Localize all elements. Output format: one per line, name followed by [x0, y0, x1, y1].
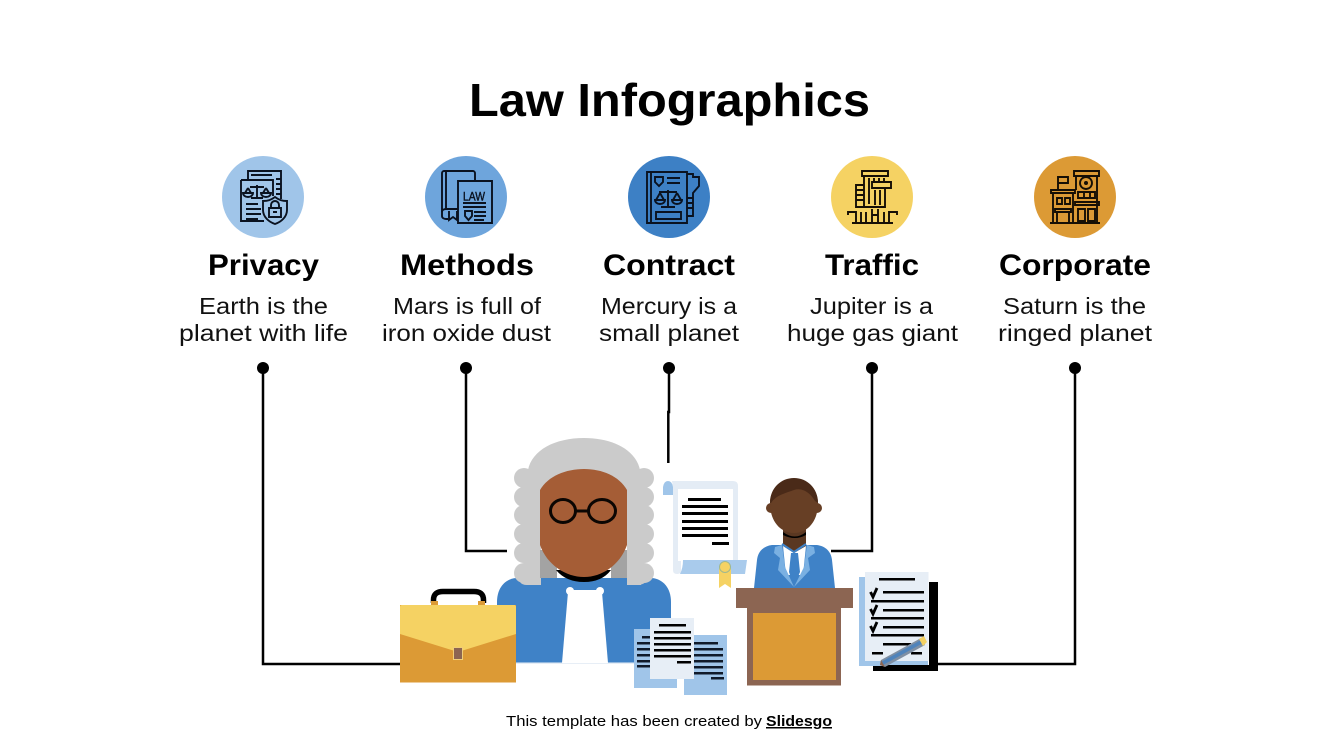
check marks	[870, 588, 877, 631]
connector: Privacy to briefcase	[257, 362, 401, 664]
column: Contract	[599, 156, 740, 346]
description	[998, 293, 1153, 346]
description: planet with life	[179, 320, 348, 346]
description: Earth is the	[199, 293, 328, 319]
description: Jupiter is a	[810, 293, 933, 319]
icon: corporate buildings	[1034, 156, 1116, 238]
head	[766, 503, 776, 513]
footer credit: This template has been created by	[506, 713, 763, 730]
robe	[497, 578, 671, 663]
illustration: scroll with seal	[663, 481, 747, 588]
heading: Contract	[603, 249, 735, 282]
column: Methods	[382, 156, 552, 346]
pencil	[880, 638, 925, 667]
illustration: briefcase	[400, 592, 516, 682]
title: Law Infographics	[469, 74, 870, 126]
footer credit: Slidesgo	[766, 713, 832, 730]
neck shadow	[556, 570, 611, 582]
illustration: checklist with pencil	[859, 572, 938, 671]
description: small planet	[599, 320, 740, 346]
connector: Corporate to checklist	[938, 362, 1081, 664]
wig	[514, 438, 654, 585]
icon: law book and paper: LAW	[463, 192, 485, 204]
column: Corporate	[998, 156, 1153, 346]
illustration: speaker at podium	[736, 478, 853, 686]
shirt, tie and lapels	[783, 546, 806, 575]
icon: contract folder with scales	[628, 156, 710, 238]
podium	[736, 588, 853, 608]
heading: Corporate	[999, 249, 1151, 282]
connector: Methods to judge	[460, 362, 507, 551]
connector: Traffic to speaker	[831, 362, 878, 551]
icon: tall building	[831, 156, 913, 238]
description: iron oxide dust	[382, 320, 552, 346]
description	[599, 293, 740, 346]
column: Traffic	[787, 156, 959, 346]
neck	[783, 528, 806, 556]
icon: privacy document with lock	[222, 156, 304, 238]
white jabot	[562, 592, 608, 663]
icon: law book and paper	[425, 156, 507, 238]
glasses	[550, 500, 616, 522]
heading: Privacy	[208, 249, 319, 282]
description: Mercury is a	[601, 293, 737, 319]
suit	[754, 545, 835, 588]
description: Mars is full of	[393, 293, 542, 319]
column: Privacy	[179, 156, 348, 346]
description	[787, 293, 959, 346]
illustration: judge	[497, 438, 671, 664]
description	[179, 293, 348, 346]
description	[382, 293, 552, 346]
heading: Methods	[400, 249, 534, 282]
description: ringed planet	[998, 320, 1153, 346]
description: Saturn is the	[1003, 293, 1146, 319]
description: huge gas giant	[787, 320, 959, 346]
illustration: documents	[634, 618, 727, 695]
face	[540, 469, 627, 577]
heading: Traffic	[825, 249, 919, 282]
connector: Contract to scroll	[663, 362, 675, 463]
